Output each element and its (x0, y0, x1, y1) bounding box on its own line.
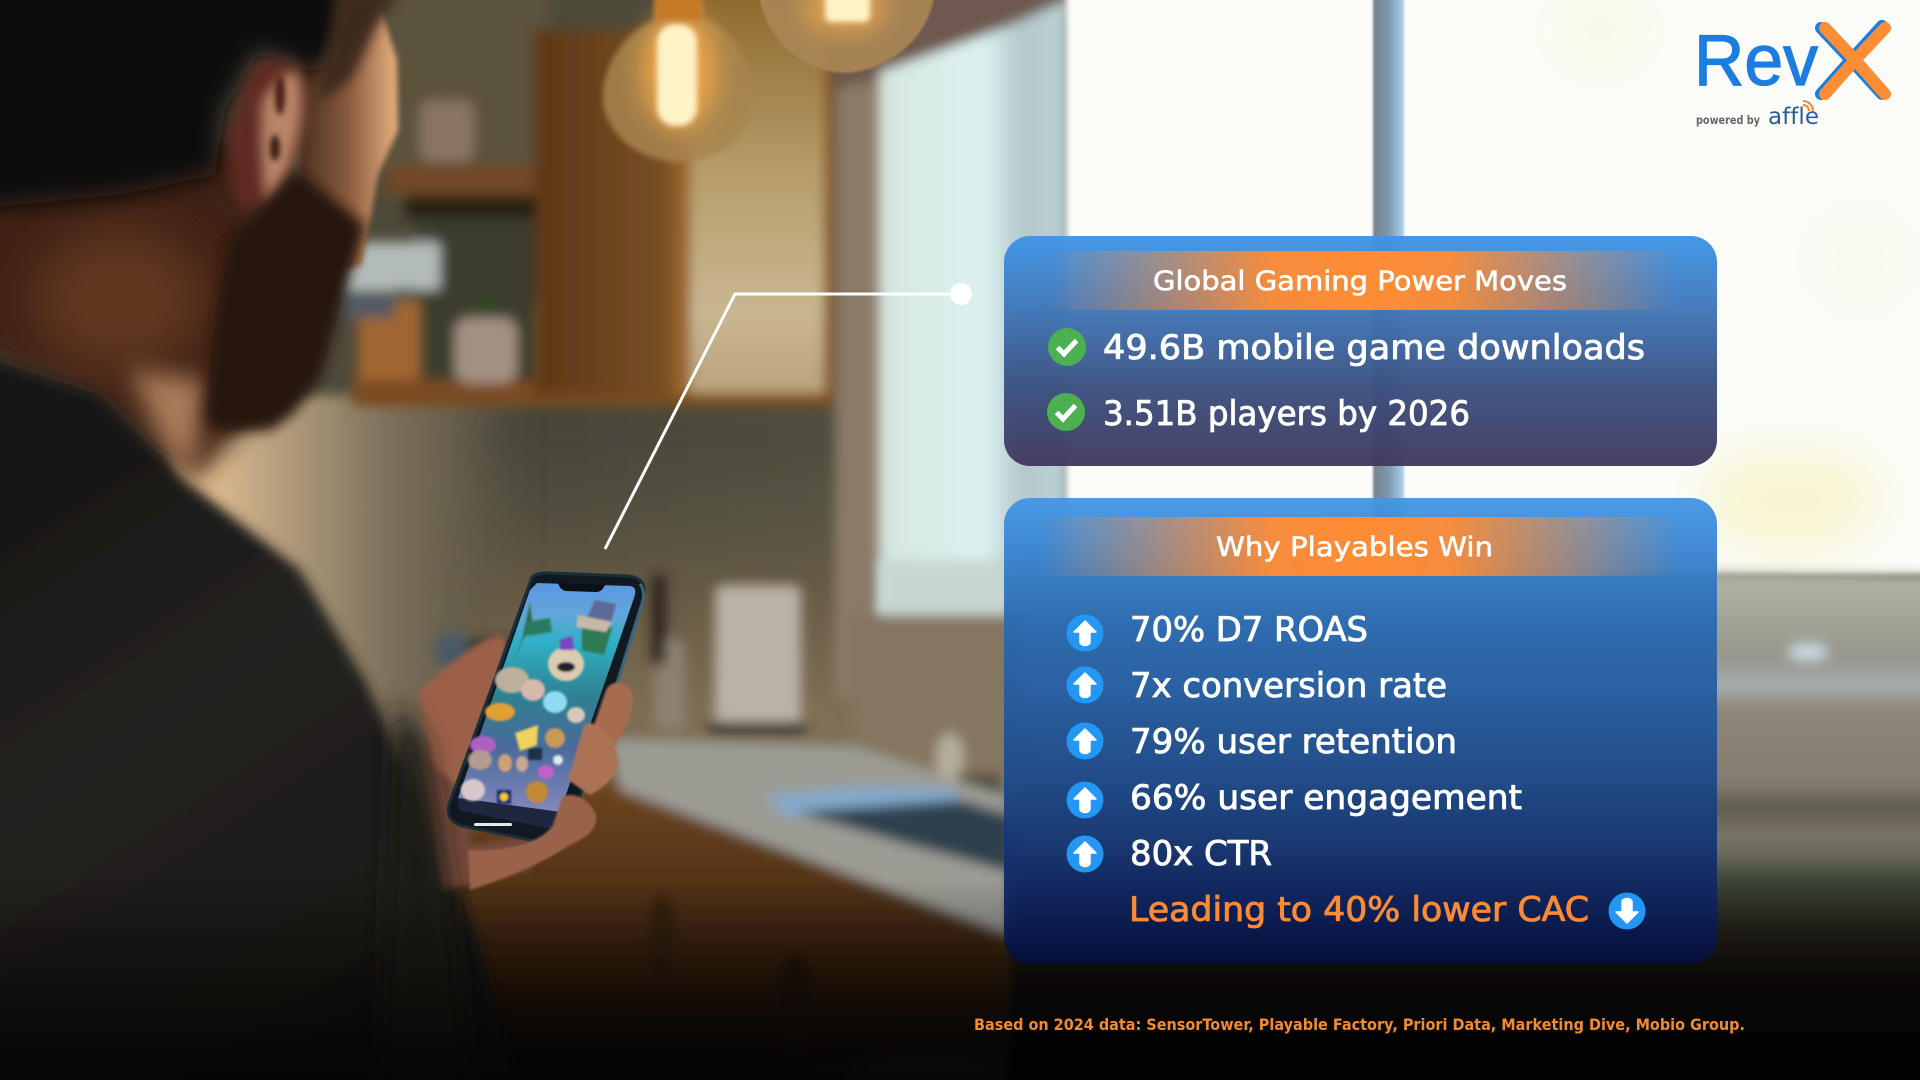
fingers over phone (468, 683, 633, 890)
panel: Why Playables Win (1004, 498, 1717, 964)
stat: players: 3.51B players by 2026 (1103, 394, 1470, 433)
hanging light bulbs (603, 0, 935, 162)
header band (1040, 517, 1680, 576)
ceiling corner and window frame (830, 0, 1080, 700)
down arrow icon (1608, 892, 1646, 930)
blurred arm edge of shirt over hand (380, 700, 470, 1080)
beard (205, 170, 365, 432)
bright window panes (1066, 0, 1920, 575)
stat: CTR: 80x CTR (1130, 834, 1272, 873)
hair (0, 0, 350, 210)
panel: Global Gaming Power Moves (1004, 236, 1717, 466)
face (300, 0, 398, 280)
affle: affle (1768, 104, 1819, 130)
Rev wordmark: Rev (1694, 21, 1818, 101)
powered by: powered by (1696, 113, 1760, 127)
stat: downloads: 49.6B mobile game downloads (1103, 328, 1645, 367)
signal arcs (1803, 101, 1813, 111)
up arrow icon (1066, 614, 1104, 652)
phone body (448, 573, 644, 843)
phone in hand (448, 573, 644, 843)
window mullion (1373, 0, 1404, 590)
stat: retention: 79% user retention (1130, 722, 1457, 761)
header band (1047, 251, 1675, 310)
screen bottom bar (458, 798, 560, 828)
right side window sill and counter (1000, 562, 1920, 1080)
ear (228, 59, 304, 212)
palm (425, 690, 560, 890)
man: neck, head and beard (0, 0, 400, 480)
man: shoulder and shirt (0, 352, 527, 1080)
up arrow icon (1066, 722, 1104, 760)
stat: engagement: 66% user engagement (1130, 778, 1522, 817)
up arrow icon (1066, 666, 1104, 704)
shelves with pots (335, 0, 832, 406)
source footnote: Based on 2024 data: SensorTower, Playable Factory, Priori Data, Marketing Dive, Mobio Group. (974, 1015, 1745, 1034)
home indicator (474, 823, 512, 826)
bulb one (603, 0, 753, 162)
thumb (418, 636, 507, 800)
heading: Global Gaming Power Moves (1153, 266, 1567, 297)
neck (0, 140, 260, 480)
up arrow icon (1066, 782, 1104, 818)
phone side edge (590, 584, 644, 770)
up arrow icon (1066, 836, 1104, 872)
game characters on screen (461, 600, 616, 804)
X mark (1821, 26, 1885, 94)
check icon (1047, 393, 1085, 431)
check icon (1048, 328, 1086, 366)
game screen (458, 583, 635, 812)
wall below the shelves (170, 395, 930, 835)
wooden cabinet (535, 0, 838, 395)
notch (558, 583, 605, 592)
lower kitchen: counter, sink, cabinets (434, 560, 1020, 1080)
stat: lower CAC: Leading to 40% lower CAC (1129, 890, 1589, 929)
stat: D7 ROAS: 70% D7 ROAS (1130, 610, 1368, 649)
dark vignette along the bottom (0, 880, 1920, 1080)
heading: Why Playables Win (1216, 532, 1493, 563)
callout line from phone to panel (605, 283, 972, 549)
hand behind phone (418, 636, 560, 890)
logo: RevX powered by affle (1694, 21, 1885, 130)
foliage glow behind window (1555, 0, 1920, 550)
bulb two (758, 0, 935, 73)
stat: conversion rate: 7x conversion rate (1130, 666, 1447, 705)
